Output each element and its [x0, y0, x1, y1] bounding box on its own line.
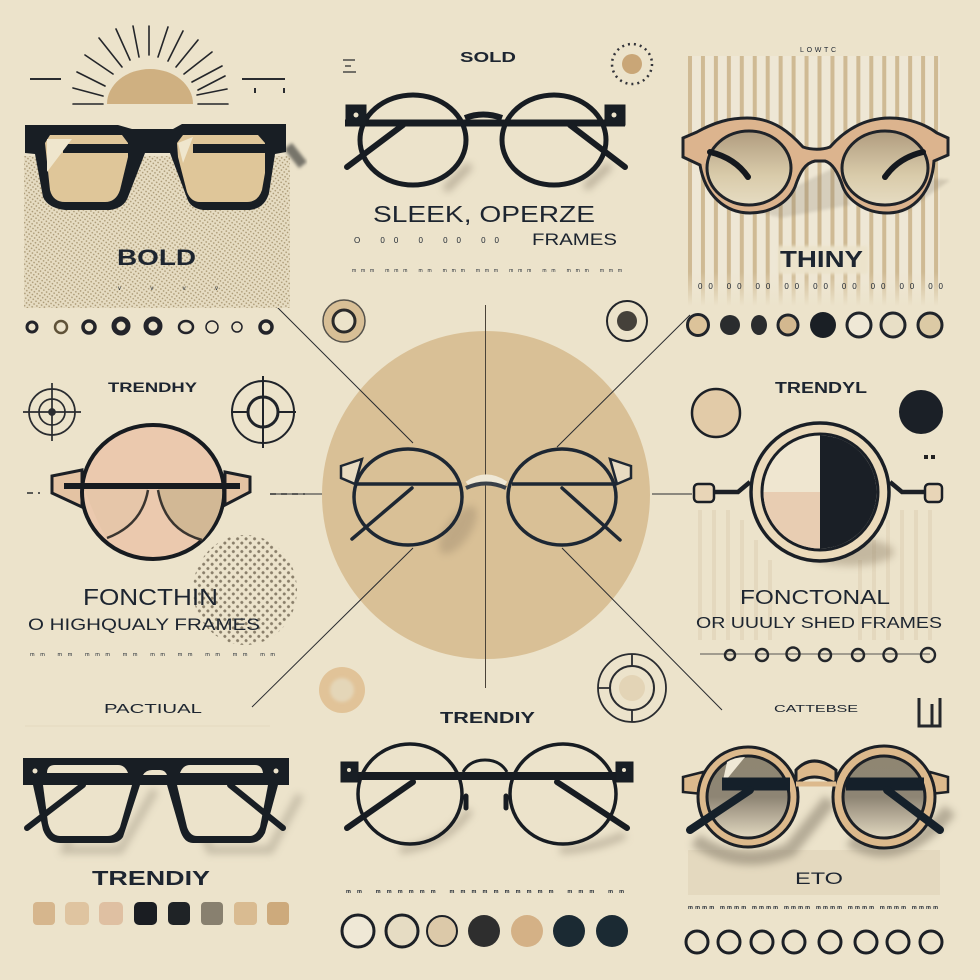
- faded block: [688, 850, 940, 895]
- heading: TRENDHY: [108, 380, 197, 395]
- small marks: mm mmmmmm mmmmmmmmmm mmm mm: [346, 889, 624, 895]
- icon: dark circle: [899, 390, 943, 434]
- swatch dots: [686, 931, 942, 953]
- heading text: FONCTONAL: [740, 587, 890, 609]
- subtext: FRAMES: [532, 230, 617, 249]
- icon: target dots: [612, 44, 652, 84]
- small mark: [924, 455, 935, 459]
- heading text: FONCTHIN: [83, 584, 218, 610]
- panel: trendy center: [341, 710, 633, 947]
- panel: sleek: [343, 44, 652, 274]
- heading: PACTIUAL: [104, 701, 202, 716]
- halftone circle: [193, 535, 297, 645]
- small marks: v v v v: [118, 286, 218, 292]
- heading: TRENDYL: [775, 380, 867, 397]
- panel: functional left: [23, 376, 305, 658]
- panel: bold: [24, 26, 303, 333]
- icon: tan ring bottom: [319, 667, 365, 713]
- glasses: sleek: [345, 95, 625, 190]
- glasses: black square thin: [23, 758, 300, 850]
- halftone background: [24, 156, 290, 308]
- label: TRENDIY: [92, 868, 211, 890]
- faded stripes: [700, 510, 930, 640]
- icon: ring top right of center: [607, 301, 647, 341]
- glasses: tan thick round: [683, 746, 950, 858]
- panel: thiny: [683, 47, 950, 338]
- glasses: tan round: [683, 118, 950, 218]
- label: ETO: [795, 869, 843, 888]
- heading: TRENDIY: [440, 710, 536, 727]
- center glasses: [341, 449, 631, 560]
- swatches: [33, 902, 289, 925]
- label: BOLD: [117, 245, 196, 270]
- heading: SOLD: [460, 49, 516, 66]
- small glyph: [343, 60, 356, 72]
- swatch dots: [27, 319, 272, 333]
- small marks: mm mm mmm mm mm mm mm mm mm: [30, 652, 275, 658]
- heading: CATTEBSE: [774, 703, 858, 715]
- faint caption: LOWTC: [800, 47, 836, 54]
- subtext: O HIGHQUALY FRAMES: [28, 616, 260, 634]
- swatch dots: [342, 915, 628, 947]
- glasses: pink round: [52, 425, 250, 559]
- connector lines: [252, 305, 722, 710]
- icon: glyph mark: [919, 698, 940, 726]
- small marks: mmmm mmmm mmmm mmmm mmmm mmmm mmmm mmmm: [688, 905, 938, 911]
- panel: eto: [683, 698, 950, 953]
- glasses: bold square: [25, 124, 303, 210]
- glasses: monocle diagram: [694, 423, 942, 566]
- icon: crosshair left: [23, 383, 81, 441]
- small marks: [30, 79, 285, 93]
- label: THINY: [780, 246, 863, 272]
- small marks: O 00 0 00 00: [354, 236, 500, 245]
- subtext: OR UUULY SHED FRAMES: [696, 615, 942, 632]
- swatch dots: [688, 312, 942, 338]
- icon: ring top left of center: [323, 300, 365, 342]
- icon: sun: [73, 26, 228, 104]
- icon: crosshair bottom: [598, 654, 666, 722]
- heading text: SLEEK, OPERZE: [373, 201, 595, 227]
- central circle: [322, 331, 650, 659]
- panel: practical: [23, 701, 300, 925]
- panel: functional right: [692, 380, 943, 662]
- swatch dots: [700, 648, 935, 662]
- icon: tan circle: [692, 389, 740, 437]
- small marks row: mmm mmm mm mmm mmm mmm mm mmm mmm: [352, 268, 622, 274]
- icon: crosshair right: [231, 376, 296, 448]
- glasses: thin round: [341, 744, 633, 850]
- stripes: [688, 56, 940, 306]
- small marks: 00 00 00 00 00 00 00 00 00: [698, 282, 944, 291]
